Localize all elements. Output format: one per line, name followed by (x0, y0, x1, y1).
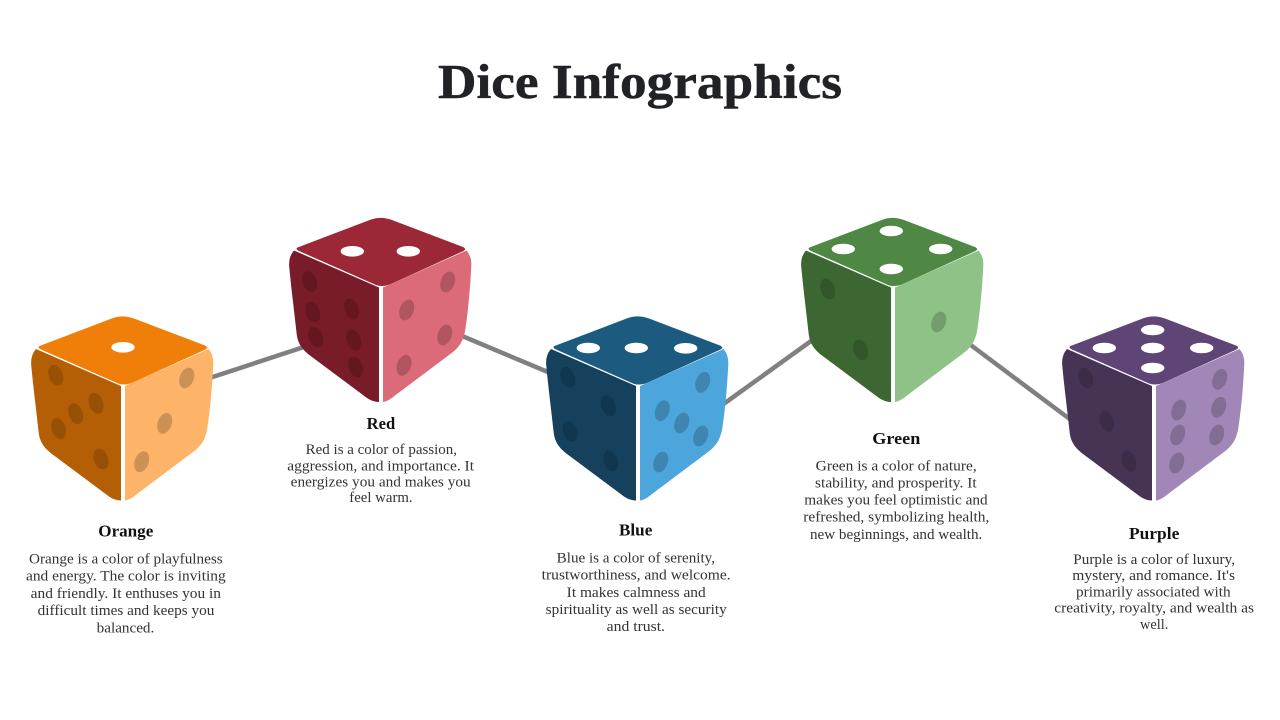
description: purple: well. (1140, 617, 1168, 633)
description: orange: Orange is a color of playfulness (29, 551, 223, 567)
text block: purple (1054, 524, 1254, 633)
description: green: refreshed, symbolizing health, (803, 510, 989, 526)
orange pips (45, 342, 197, 474)
description: orange: and friendly. It enthuses you in (31, 586, 221, 602)
description: green: stability, and prosperity. It (815, 475, 977, 491)
description: blue: spirituality as well as security (546, 602, 728, 618)
blue pips (557, 343, 713, 475)
green pips (817, 226, 952, 363)
die: blue (546, 316, 728, 500)
heading: blue: Blue (619, 521, 652, 540)
description: orange: difficult times and keeps you (38, 603, 214, 619)
green faces (801, 218, 983, 402)
heading: green: Green (872, 429, 920, 448)
description: orange: balanced. (97, 620, 154, 636)
text block: blue (542, 521, 731, 635)
description: blue: It makes calmness and (567, 585, 706, 601)
text block: red (287, 414, 474, 506)
blue faces (546, 316, 728, 500)
heading: red: Red (367, 414, 395, 433)
description: blue: trustworthiness, and welcome. (542, 568, 731, 584)
description: green: Green is a color of nature, (816, 458, 977, 474)
description: purple: Purple is a color of luxury, (1073, 552, 1235, 568)
die: orange (31, 316, 213, 500)
description: orange: and energy. The color is inviting (26, 568, 226, 584)
description: green (803, 458, 989, 543)
description: red: Red is a color of passion, (306, 442, 457, 458)
description: blue: and trust. (607, 619, 665, 635)
description: purple: mystery, and romance. It's (1072, 568, 1235, 584)
description: red (287, 442, 474, 506)
description: purple (1054, 552, 1254, 633)
text block: orange (26, 522, 226, 636)
description: green: new beginnings, and wealth. (810, 527, 982, 543)
purple faces (1062, 316, 1244, 500)
description: green: makes you feel optimistic and (804, 492, 988, 508)
description: red: feel warm. (349, 490, 413, 506)
die: purple (1062, 316, 1244, 500)
description: purple: primarily associated with (1076, 584, 1231, 600)
red faces (289, 218, 471, 402)
die: red (289, 218, 471, 402)
orange faces (31, 316, 213, 500)
text block: green (803, 429, 989, 543)
heading: orange: Orange (98, 522, 153, 541)
description: red: energizes you and makes you (291, 475, 471, 491)
description: purple: creativity, royalty, and wealth as (1054, 601, 1254, 617)
red pips (299, 246, 458, 380)
description: red: aggression, and importance. It (287, 458, 474, 474)
title: Dice Infographics (438, 54, 842, 109)
connector lines (205, 333, 1075, 423)
description: blue: Blue is a color of serenity, (557, 550, 715, 566)
description: blue (542, 550, 731, 635)
die: green (801, 218, 983, 402)
description: orange (26, 551, 226, 636)
purple pips (1075, 325, 1230, 476)
heading: purple: Purple (1129, 524, 1179, 543)
